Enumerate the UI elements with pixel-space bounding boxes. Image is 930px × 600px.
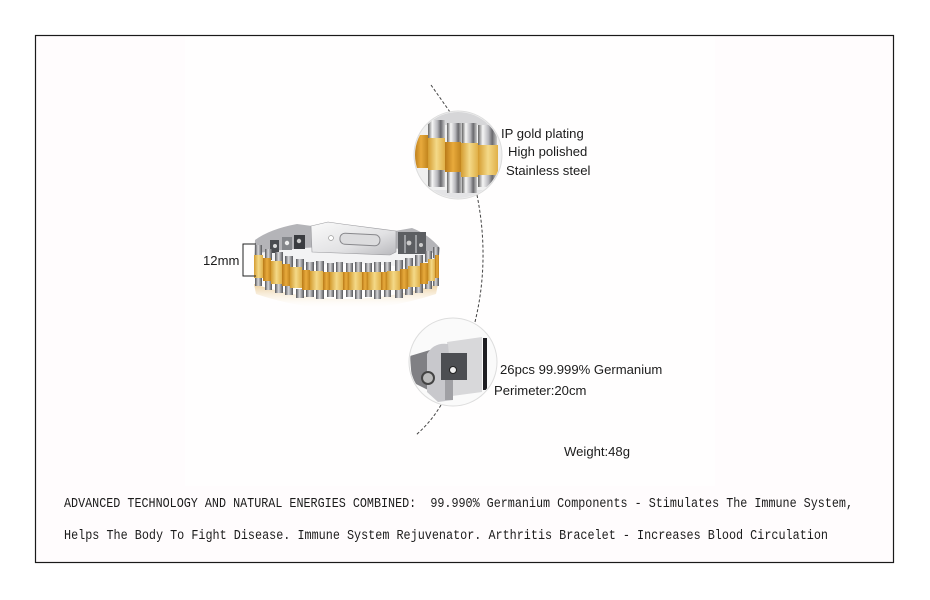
magnets left	[270, 235, 305, 253]
detail text: germanium: 26pcs 99.999% Germanium	[500, 362, 662, 377]
bottom link heads	[255, 277, 439, 299]
detail text: germanium	[494, 362, 662, 398]
dashed line: middle	[475, 195, 483, 322]
detail text: plating: IP gold plating	[501, 126, 584, 141]
detail text: weight: Weight:48g	[564, 444, 630, 459]
detail text: germanium: Perimeter:20cm	[494, 383, 587, 398]
bracelet reflection	[254, 284, 438, 309]
top link heads	[255, 245, 439, 273]
detail text: plating	[501, 126, 591, 178]
12mm bracket	[243, 244, 256, 276]
clasp	[311, 222, 396, 255]
description text: Helps The Body To Fight Disease. Immune System Rejuvenator. Arthritis Bracelet - Increases Blood Circulation	[64, 529, 828, 544]
description text	[64, 497, 853, 544]
bracelet	[254, 222, 440, 309]
magnets right	[398, 232, 426, 254]
dashed line: bottom	[416, 405, 441, 435]
detail circle: germanium	[409, 318, 497, 406]
label: 12mm: 12mm	[203, 253, 239, 268]
detail circle: gold plating	[414, 111, 502, 200]
detail text: plating: High polished	[508, 144, 587, 159]
bracelet back arc	[254, 224, 440, 262]
detail text: plating: Stainless steel	[506, 163, 591, 178]
links gold	[254, 255, 439, 290]
dashed line: top	[431, 85, 450, 112]
